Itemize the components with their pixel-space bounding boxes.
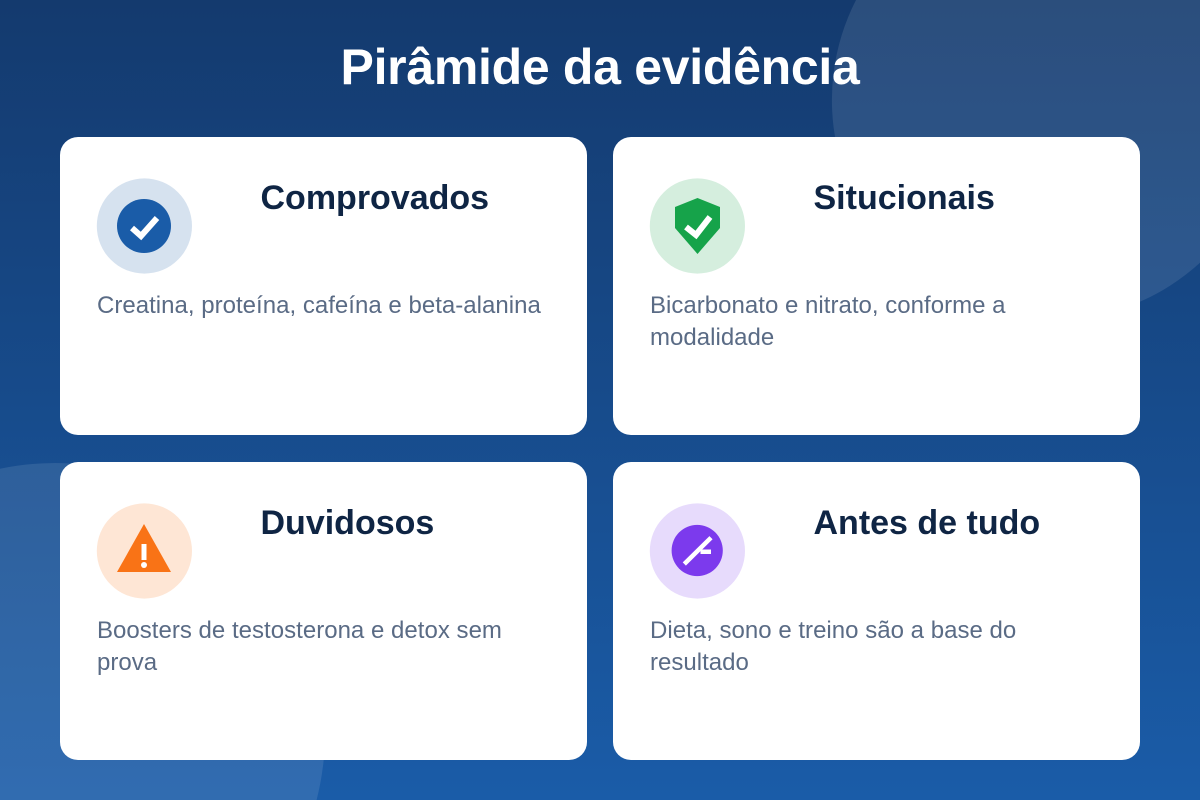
panel: Antes de tudo bbox=[613, 462, 1140, 760]
text: Comprovados: Creatina, proteína, cafeína e beta-alanina bbox=[97, 292, 541, 319]
text: Antes de tudo: Dieta, sono e treino são a base do resultado bbox=[650, 617, 1016, 676]
icon: orange warning bbox=[96, 503, 192, 599]
title: Pirâmide da evidência bbox=[341, 39, 859, 95]
icon: green shield bbox=[650, 178, 745, 274]
heading: Duvidosos: Duvidosos bbox=[260, 504, 434, 542]
text: Situcionais: Bicarbonato e nitrato, conforme a modalidade bbox=[650, 292, 1006, 351]
panel: Comprovados bbox=[60, 137, 587, 435]
icon: blue check bbox=[96, 178, 192, 274]
heading: Antes de tudo: Antes de tudo bbox=[814, 504, 1040, 542]
panel: Duvidosos bbox=[60, 462, 587, 760]
icon: purple branch bbox=[650, 504, 745, 598]
text: Duvidosos: Boosters de testosterona e detox sem prova bbox=[97, 617, 502, 676]
heading: Situcionais: Situcionais bbox=[814, 179, 995, 217]
heading: Comprovados: Comprovados bbox=[260, 179, 489, 217]
panel: Situcionais bbox=[613, 137, 1140, 435]
